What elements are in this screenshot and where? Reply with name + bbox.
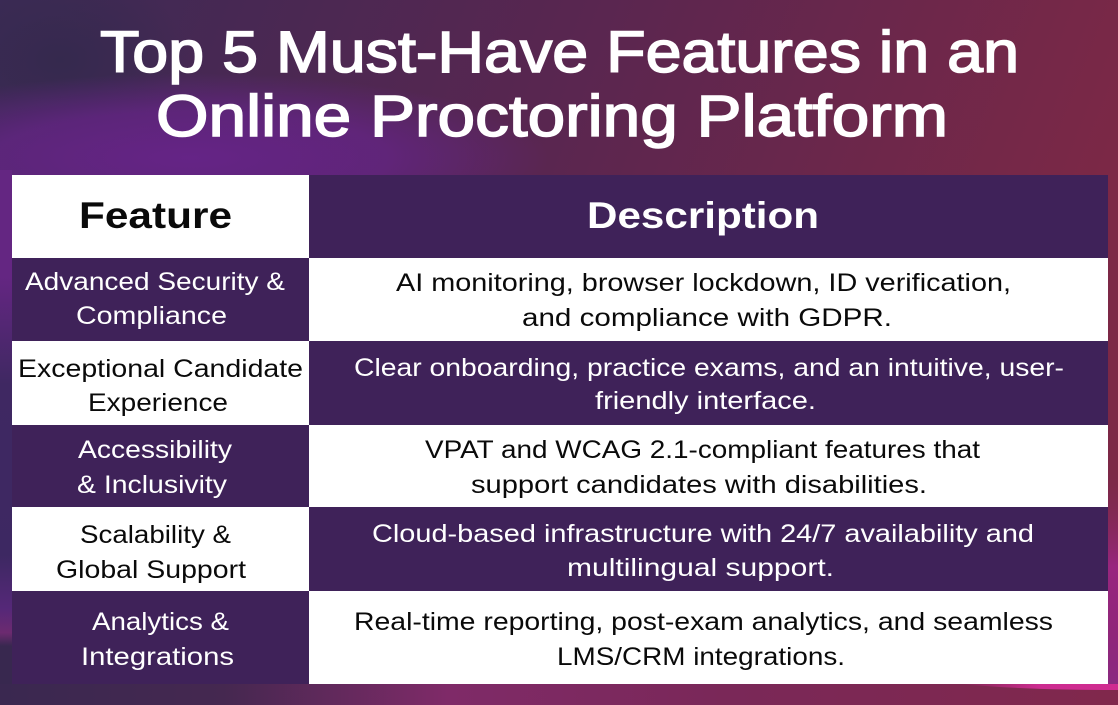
- row: scalability and global support: multilingual support.: [567, 554, 834, 582]
- row: scalability and global support: Global Support: [56, 556, 246, 584]
- row: analytics and integrations: Integrations: [81, 643, 234, 671]
- comparison table: [12, 175, 1108, 684]
- row: analytics and integrations: [12, 591, 1108, 684]
- row: accessibility and inclusivity: Accessibility: [78, 436, 233, 464]
- row: exceptional candidate experience: Experience: [88, 389, 228, 417]
- row: scalability and global support: Scalability &: [80, 521, 231, 549]
- row: advanced security and compliance: and compliance with GDPR.: [522, 304, 892, 332]
- title: Online Proctoring Platform: [156, 84, 948, 149]
- row: analytics and integrations: Analytics &: [92, 608, 229, 636]
- row: exceptional candidate experience: Clear onboarding, practice exams, and an intuitive, user-: [354, 354, 1064, 382]
- row: exceptional candidate experience: friendly interface.: [595, 387, 816, 415]
- row: advanced security and compliance: AI monitoring, browser lockdown, ID verification,: [396, 269, 1011, 297]
- row: accessibility and inclusivity: & Inclusivity: [77, 471, 228, 499]
- row: advanced security and compliance: [12, 258, 1108, 341]
- row: scalability and global support: Cloud-based infrastructure with 24/7 availability and: [372, 520, 1034, 548]
- header row: [12, 175, 1108, 258]
- header row: Feature: [79, 195, 232, 236]
- row: analytics and integrations: Real-time reporting, post-exam analytics, and seamless: [354, 608, 1053, 636]
- title: Top 5 Must-Have Features in an: [100, 20, 1019, 85]
- row: accessibility and inclusivity: VPAT and WCAG 2.1-compliant features that: [425, 436, 980, 464]
- row: scalability and global support: [12, 507, 1108, 591]
- row: advanced security and compliance: Compliance: [76, 302, 227, 330]
- row: advanced security and compliance: Advanced Security &: [25, 268, 285, 296]
- row: exceptional candidate experience: Exceptional Candidate: [18, 355, 303, 383]
- title: [100, 20, 1019, 149]
- row: accessibility and inclusivity: support candidates with disabilities.: [471, 471, 927, 499]
- row: accessibility and inclusivity: [12, 425, 1108, 507]
- row: exceptional candidate experience: [12, 341, 1108, 425]
- row: analytics and integrations: LMS/CRM integrations.: [557, 643, 845, 671]
- header row: Description: [587, 195, 819, 236]
